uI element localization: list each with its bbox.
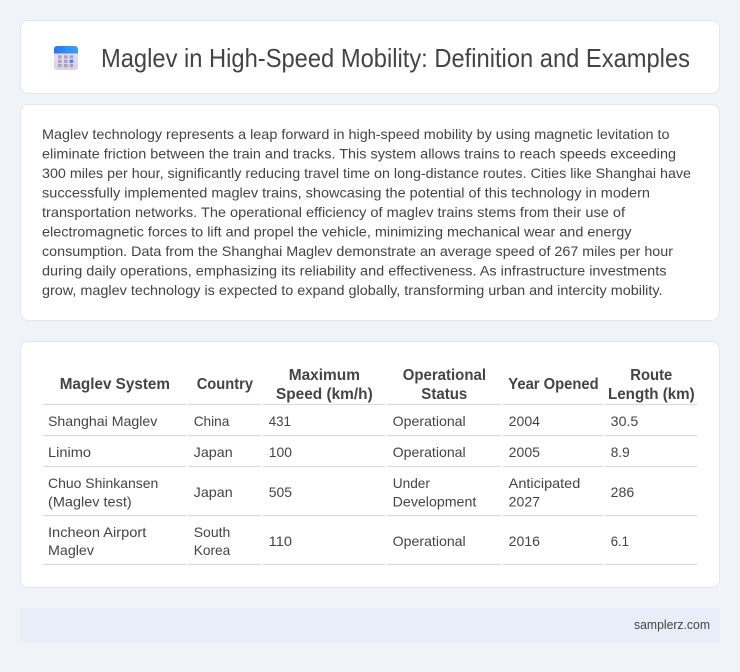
table row: Shanghai Maglev: 2004: [509, 413, 540, 429]
text block: description: [42, 126, 691, 298]
table header row: [43, 367, 697, 404]
table header row: Speed (km/h): [276, 386, 373, 403]
table row: Chuo Shinkansen: Development: [393, 494, 476, 510]
text block: description: eliminate friction between the train and tracks. This system allows trains to reach speeds exceeding: [42, 146, 676, 162]
text block: description: successfully implemented maglev trains, showcasing the potential of this technology in modern: [42, 184, 650, 200]
table row: Linimo: Operational: [393, 444, 466, 460]
table row: Incheon Airport Maglev: Maglev: [48, 542, 94, 558]
table row: Chuo Shinkansen: [43, 475, 697, 516]
table row: Chuo Shinkansen: Chuo Shinkansen: [48, 475, 158, 491]
table row: Shanghai Maglev: Shanghai Maglev: [48, 413, 157, 429]
table header row: Status: [421, 386, 467, 403]
table row: Chuo Shinkansen: Under: [393, 475, 430, 491]
icon: calendar: [54, 46, 78, 70]
table row: Incheon Airport Maglev: Korea: [194, 542, 231, 558]
table row: Chuo Shinkansen: 286: [611, 484, 635, 500]
table row: Shanghai Maglev: China: [194, 413, 229, 429]
table row: Incheon Airport Maglev: South: [194, 524, 230, 540]
table header row: Route: [630, 367, 672, 384]
table row: Linimo: Linimo: [48, 444, 91, 460]
table row: Incheon Airport Maglev: Incheon Airport: [48, 524, 146, 540]
table row: Incheon Airport Maglev: Operational: [393, 533, 466, 549]
table row: Chuo Shinkansen: 505: [269, 484, 292, 500]
table header row: Year Opened: [508, 376, 599, 393]
footer bar: [20, 608, 720, 642]
table row: Shanghai Maglev: [43, 413, 697, 436]
table row: Linimo: 100: [269, 444, 292, 460]
table row: Shanghai Maglev: 30.5: [611, 413, 639, 429]
table row: Incheon Airport Maglev: 2016: [509, 533, 540, 549]
title: Maglev in High-Speed Mobility: Definition and Examples: [101, 45, 690, 73]
table row: Linimo: [43, 444, 697, 466]
table row: Chuo Shinkansen: (Maglev test): [48, 494, 132, 510]
table header row: Maximum: [289, 367, 360, 384]
table row: Shanghai Maglev: Operational: [393, 413, 466, 429]
table header row: Maglev System: [60, 376, 170, 393]
table header row: Operational: [403, 367, 486, 384]
panel: header card: [20, 20, 720, 94]
text block: description: 300 miles per hour, significantly reducing travel time on long-distance routes. Cities like Shanghai have: [42, 165, 691, 181]
panel: description card: [20, 104, 720, 320]
table row: Incheon Airport Maglev: 110: [269, 533, 292, 549]
table row: Incheon Airport Maglev: [43, 524, 697, 564]
table row: Chuo Shinkansen: 2027: [509, 494, 540, 510]
table row: Chuo Shinkansen: Anticipated: [509, 475, 580, 491]
text block: description: transportation networks. The operational efficiency of maglev trains stems from their use of: [42, 204, 625, 220]
table row: Incheon Airport Maglev: 6.1: [611, 533, 629, 549]
footer text: samplerz.com: [634, 617, 710, 632]
text block: description: electromagnetic forces to lift and propel the vehicle, minimizing mechanical wear and energy: [42, 224, 632, 240]
text block: description: consumption. Data from the Shanghai Maglev demonstrate an average speed of 267 miles per hour: [42, 243, 673, 259]
table row: Linimo: Japan: [194, 444, 233, 460]
panel: table card: [20, 342, 720, 588]
table row: Linimo: 8.9: [611, 444, 630, 460]
table row: Shanghai Maglev: 431: [269, 413, 291, 429]
text block: description: Maglev technology represents a leap forward in high-speed mobility by using magnetic levitation to: [42, 126, 670, 142]
text block: description: during daily operations, emphasizing its reliability and effectiveness. As infrastructure investments: [42, 262, 666, 278]
text block: description: grow, maglev technology is expected to expand globally, transforming urban and intercity mobility.: [42, 282, 662, 298]
table header row: Length (km): [608, 386, 695, 403]
table row: Chuo Shinkansen: Japan: [194, 484, 233, 500]
table header row: Country: [197, 376, 253, 393]
table row: Linimo: 2005: [509, 444, 540, 460]
